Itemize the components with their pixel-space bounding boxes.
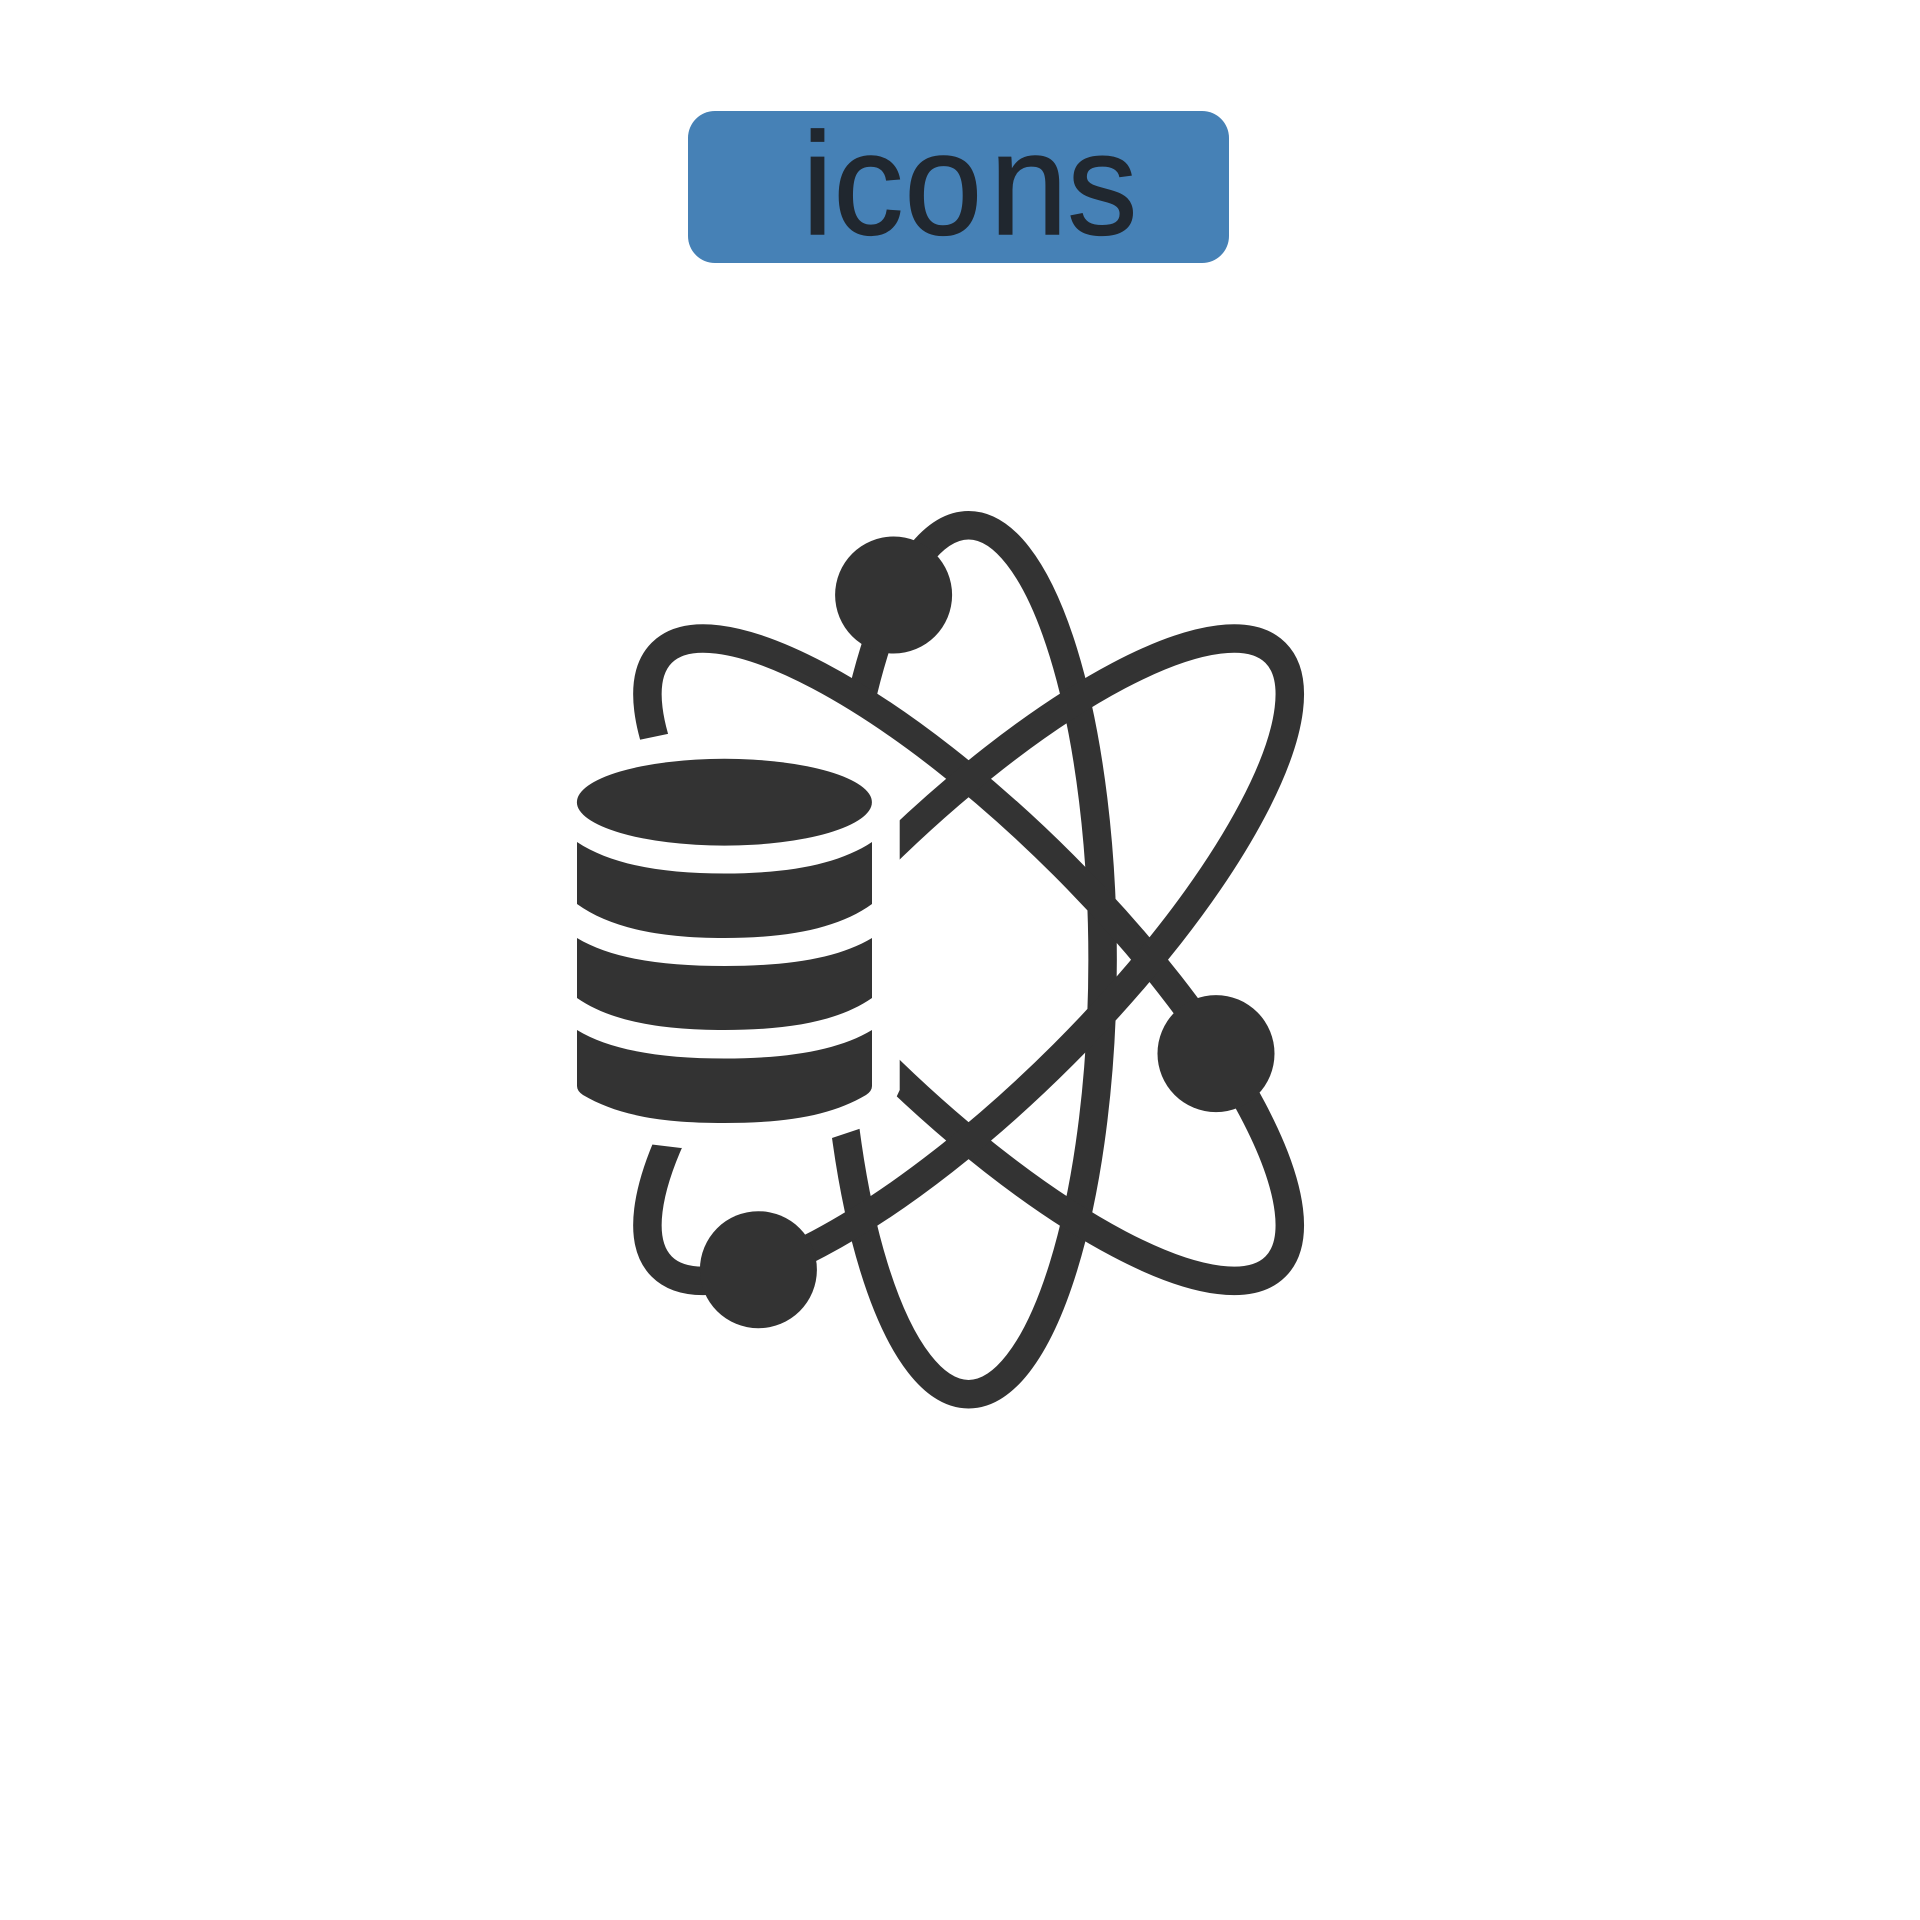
atom nucleus: bottom left <box>700 1211 817 1328</box>
atom orbit: bottom-left to top-right <box>567 558 1370 1361</box>
atom orbit: top-left to bottom-right <box>567 558 1370 1361</box>
heading badge: icons <box>688 104 1229 266</box>
database middle band <box>577 938 872 1030</box>
atom orbit: vertical <box>835 525 1103 1394</box>
database lower band <box>577 1030 872 1123</box>
badge background <box>688 111 1229 263</box>
database upper band <box>577 842 872 938</box>
atom nucleus: top <box>835 536 952 654</box>
icon: atom with database <box>567 525 1370 1394</box>
badge label: icons <box>802 104 1137 266</box>
database top disc <box>577 759 872 846</box>
atom nucleus: right <box>1158 995 1274 1112</box>
icon: database stack <box>577 759 872 1123</box>
